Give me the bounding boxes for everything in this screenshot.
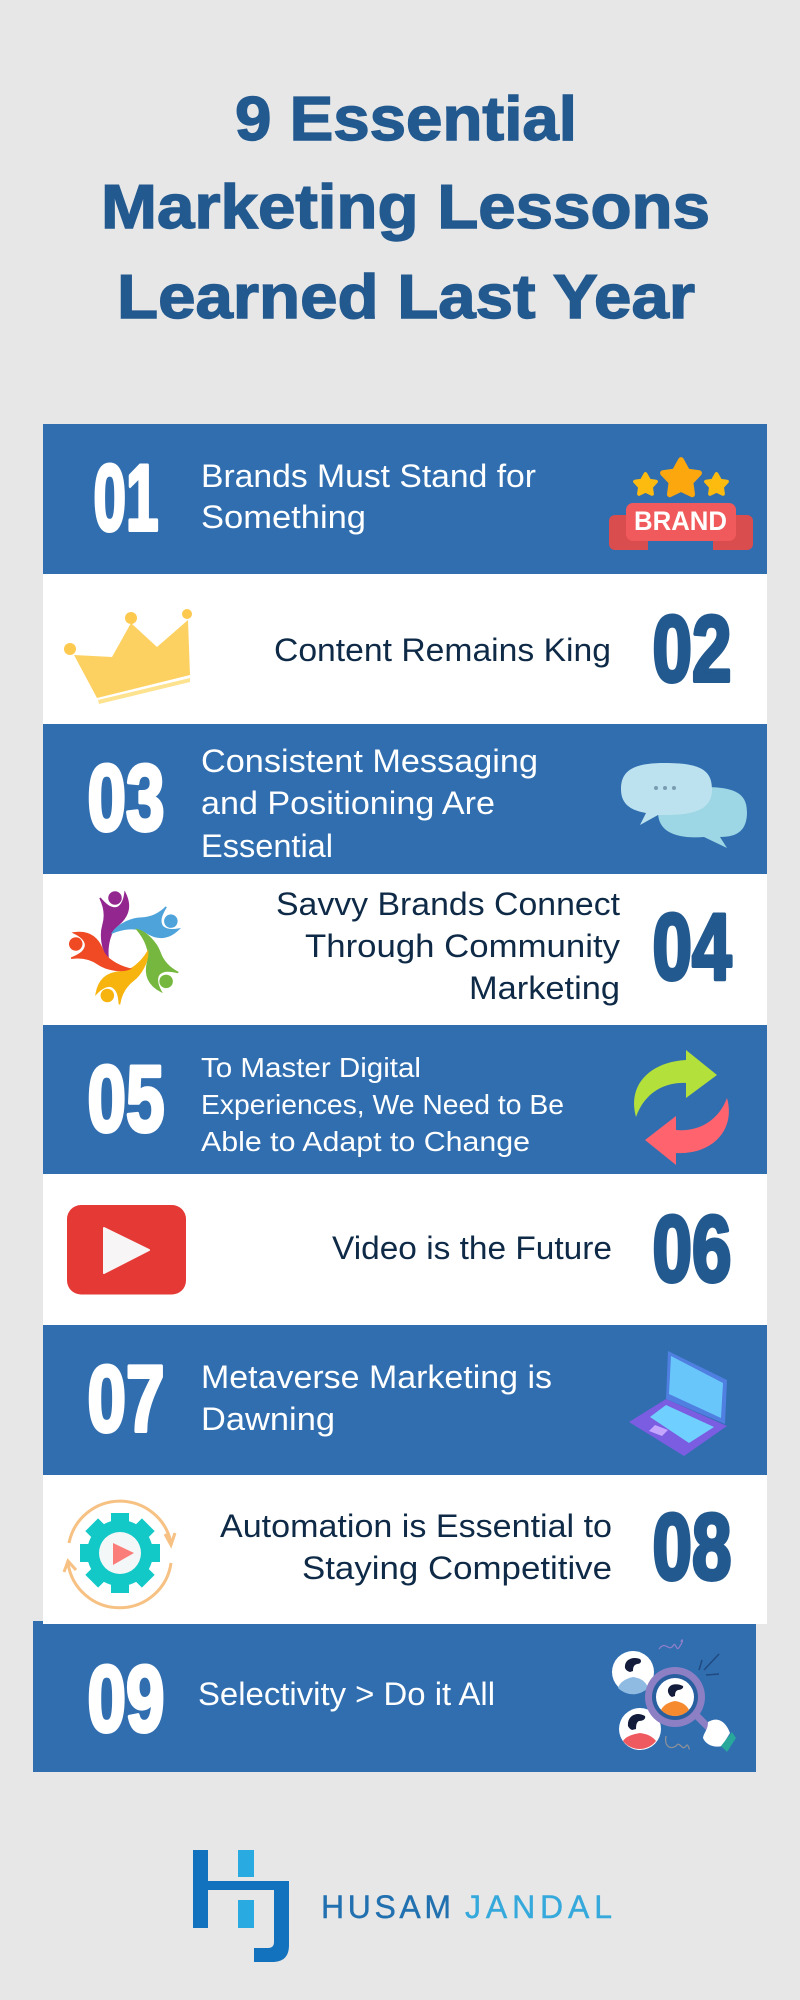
text: video: Video is the Future	[332, 1230, 612, 1266]
text: savvy brands	[276, 886, 620, 1006]
text: metaverse	[201, 1359, 552, 1437]
icon: crown	[64, 609, 192, 704]
icon: people under magnifier	[612, 1640, 736, 1752]
text: digital experiences: Experiences, We Need to Be	[201, 1089, 564, 1120]
panel: lesson 08	[43, 1475, 767, 1624]
text: content: Content Remains King	[274, 632, 611, 668]
text: consistent messaging	[201, 743, 538, 864]
panel: lesson 04	[43, 874, 767, 1025]
number 06: 06	[652, 1196, 732, 1301]
title	[101, 85, 710, 332]
panel: lesson 07	[43, 1325, 767, 1475]
icon: gear with play	[64, 1501, 175, 1608]
panel: lesson 05	[43, 1025, 767, 1174]
text: savvy brands: Savvy Brands Connect	[276, 886, 620, 922]
text: consistent messaging: Consistent Messaging	[201, 743, 538, 779]
logo wordmark: JANDAL	[465, 1889, 612, 1925]
text: savvy brands: Through Community	[305, 928, 620, 964]
title: Learned Last Year	[117, 263, 695, 332]
number 03: 03	[88, 745, 164, 850]
icon: play button	[67, 1205, 186, 1294]
number 01: 01	[94, 445, 158, 550]
panel: lesson 03	[43, 724, 767, 874]
panel: lesson 02	[43, 574, 767, 724]
logo: Husam Jandal	[193, 1850, 612, 1962]
title: 9 Essential	[235, 85, 577, 154]
panel: lesson 01	[43, 424, 767, 574]
text: automation: Staying Competitive	[302, 1550, 612, 1586]
text: brands	[201, 458, 536, 535]
number 02: 02	[652, 596, 732, 701]
icon: laptop	[629, 1351, 727, 1456]
icon: community circle	[65, 892, 182, 1009]
panel: lesson 06	[43, 1174, 767, 1325]
icon: brand badge: BRAND	[634, 506, 727, 536]
text: consistent messaging: Essential	[201, 828, 333, 864]
text: selectivity: Selectivity > Do it All	[198, 1676, 495, 1712]
text: metaverse: Dawning	[201, 1401, 335, 1437]
text: digital experiences	[201, 1052, 564, 1157]
logo wordmark	[321, 1889, 612, 1925]
text: digital experiences: Able to Adapt to Change	[201, 1126, 530, 1157]
number 07: 07	[88, 1346, 164, 1451]
number 04: 04	[652, 894, 732, 999]
icon: chat bubbles	[621, 763, 747, 848]
text: digital experiences: To Master Digital	[201, 1052, 421, 1083]
icon: cycle arrows	[634, 1050, 729, 1165]
text: consistent messaging: and Positioning Are	[201, 785, 495, 821]
number 05: 05	[88, 1046, 164, 1151]
text: brands: Something	[201, 499, 366, 535]
text: savvy brands: Marketing	[469, 970, 620, 1006]
text: automation: Automation is Essential to	[220, 1508, 612, 1544]
text: metaverse: Metaverse Marketing is	[201, 1359, 552, 1395]
text: brands: Brands Must Stand for	[201, 458, 536, 494]
title: Marketing Lessons	[101, 173, 710, 242]
panel: lesson 09	[33, 1621, 756, 1772]
text: automation	[220, 1508, 612, 1586]
number 09: 09	[88, 1646, 164, 1751]
logo wordmark: HUSAM	[321, 1889, 451, 1925]
number 08: 08	[652, 1494, 732, 1599]
icon: brand badge	[609, 460, 753, 552]
logo mark	[193, 1850, 289, 1962]
